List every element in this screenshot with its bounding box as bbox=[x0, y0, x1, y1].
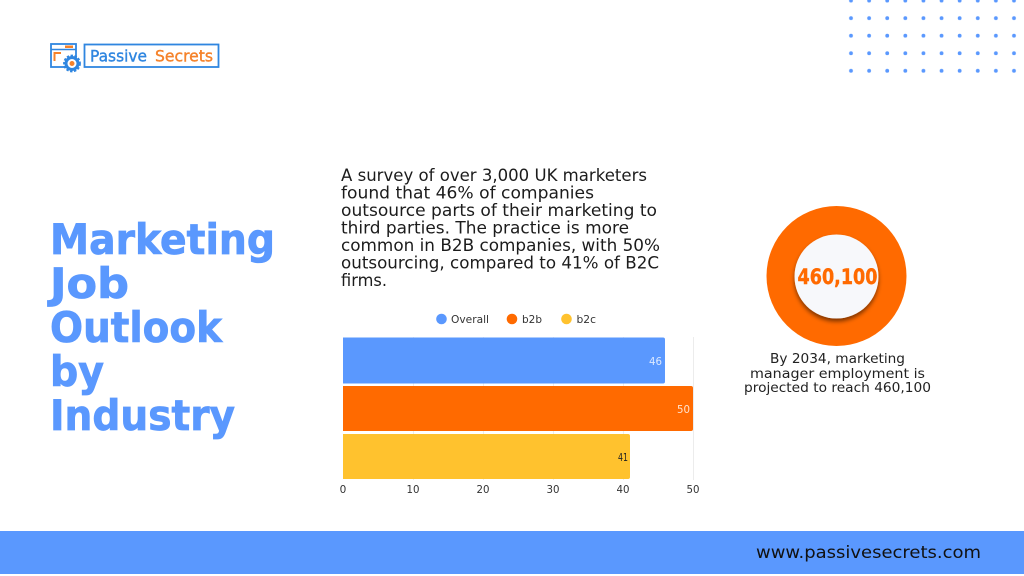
chart legend: Overall bbox=[451, 314, 489, 326]
website url: www.passivesecrets.com bbox=[756, 543, 981, 562]
title: Job bbox=[47, 259, 129, 308]
chart legend: b2b bbox=[522, 314, 542, 326]
chart legend bbox=[436, 314, 596, 326]
logo wordmark: Secrets bbox=[155, 46, 213, 66]
survey text block: common in B2B companies, with 50% bbox=[341, 236, 660, 255]
x axis labels: 0 bbox=[340, 484, 346, 496]
survey text block: outsource parts of their marketing to bbox=[341, 201, 657, 220]
survey text block: third parties. The practice is more bbox=[341, 218, 629, 238]
donut caption: projected to reach 460,100 bbox=[744, 380, 931, 396]
x axis labels: 30 bbox=[546, 484, 560, 496]
survey text block: firms. bbox=[341, 271, 387, 290]
footer bar bbox=[0, 531, 1024, 574]
title: Marketing bbox=[50, 215, 275, 264]
donut caption bbox=[744, 351, 931, 396]
donut stat: 460,100 bbox=[766, 206, 906, 346]
x axis labels: 10 bbox=[406, 484, 420, 496]
survey text block bbox=[341, 166, 660, 290]
icon: browser window with gear bbox=[51, 44, 80, 71]
title: by bbox=[50, 347, 104, 396]
title: Industry bbox=[50, 391, 235, 440]
chart legend: b2c bbox=[576, 314, 596, 326]
logo wordmark bbox=[84, 44, 218, 67]
bar chart: outsourcing share bbox=[340, 314, 700, 496]
bar: Overall 46: 46 bbox=[649, 356, 662, 368]
survey text block: A survey of over 3,000 UK marketers bbox=[341, 166, 647, 185]
donut stat: 460,100: 460,100 bbox=[798, 265, 878, 289]
title bbox=[47, 215, 275, 440]
x axis labels bbox=[340, 484, 700, 496]
bar: Overall 46 bbox=[343, 338, 665, 384]
donut caption: manager employment is bbox=[750, 366, 925, 382]
bar: b2c 41 bbox=[343, 434, 630, 479]
survey text block: found that 46% of companies bbox=[341, 184, 594, 202]
x axis labels: 50 bbox=[686, 484, 700, 496]
x axis labels: 20 bbox=[476, 484, 490, 496]
logo: Passive Secrets bbox=[51, 44, 218, 71]
x axis labels: 40 bbox=[616, 484, 630, 496]
bar: b2c 41: 41 bbox=[618, 452, 628, 464]
decorative dot grid bbox=[842, 0, 1024, 80]
survey text block: outsourcing, compared to 41% of B2C bbox=[341, 254, 659, 272]
bar: b2b 50 bbox=[343, 386, 693, 431]
donut caption: By 2034, marketing bbox=[770, 351, 905, 367]
bar: b2b 50: 50 bbox=[677, 404, 690, 416]
logo wordmark: Passive bbox=[90, 46, 147, 66]
title: Outlook bbox=[50, 303, 223, 352]
